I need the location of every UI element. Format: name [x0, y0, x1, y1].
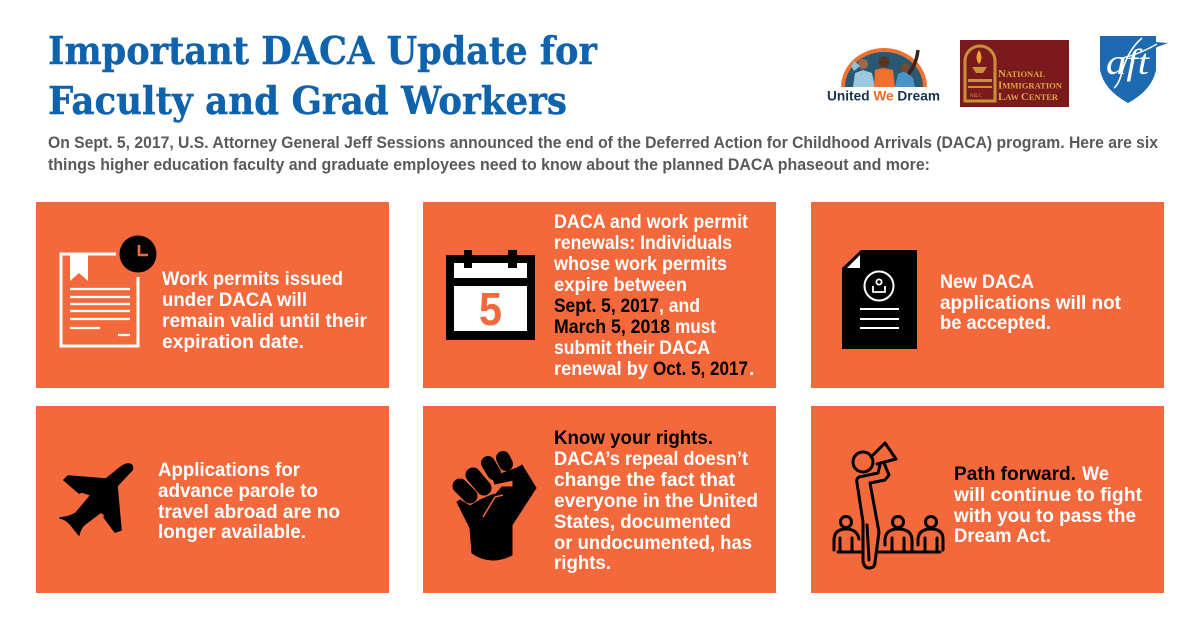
text: work permits: [162, 268, 367, 353]
icon: calendar: [446, 250, 535, 340]
text: work permits: under DACA will: [162, 289, 307, 311]
logo: United We Dream: [827, 48, 940, 104]
text: renewals: Oct. 5, 2017: [653, 358, 748, 380]
panel: advance parole: [36, 406, 389, 593]
text: path forward: [953, 463, 1142, 547]
text: renewals: Sept. 5, 2017: [554, 295, 659, 317]
icon: person with megaphone and crowd: [834, 443, 943, 568]
text: renewals: DACA and work permit: [554, 211, 748, 233]
text: new applications: [940, 271, 1121, 334]
text: know your rights: States, documented: [554, 511, 731, 533]
logo: National Immigration Law Center: NATIONAL: [998, 68, 1045, 80]
text: new applications: applications will not: [940, 292, 1121, 314]
text: renewals: , and: [659, 295, 700, 317]
text: work permits: Work permits issued: [162, 268, 343, 290]
icon: airplane: [60, 464, 132, 535]
title: Faculty and Grad Workers: [48, 78, 567, 123]
icon: application document: [842, 250, 917, 349]
panel: path forward: [811, 406, 1164, 593]
text: know your rights: DACA’s repeal doesn’t: [554, 448, 748, 470]
text: renewals: submit their DACA: [554, 337, 710, 359]
text: renewals: expire between: [554, 274, 687, 296]
icon: document with clock: [61, 236, 156, 346]
text: renewals: whose work permits: [553, 253, 727, 275]
text: path forward: Path forward.: [954, 463, 1076, 485]
logo: AFT shield: aft: [1106, 42, 1150, 82]
icon: raised fist: [457, 458, 536, 560]
text: path forward: Dream Act.: [954, 525, 1051, 547]
intro text: [48, 133, 1158, 174]
text: advance parole: travel abroad are no: [158, 501, 340, 523]
text: work permits: remain valid until their: [162, 310, 367, 332]
text: know your rights: or undocumented, has: [554, 532, 752, 554]
logo: AFT shield: [1100, 36, 1168, 103]
text: advance parole: Applications for: [158, 459, 300, 481]
text: know your rights: change the fact that: [554, 469, 735, 491]
text: renewals: renewals: Individuals: [554, 232, 732, 254]
title: Important DACA Update for: [48, 28, 598, 73]
text: new applications: New DACA: [940, 271, 1034, 293]
text: renewals: must: [675, 316, 716, 338]
intro text: things higher education faculty and graduate employees need to know about the planned DACA phaseout and more:: [48, 155, 930, 174]
text: work permits: expiration date.: [162, 331, 304, 353]
text: know your rights: rights.: [554, 552, 611, 574]
logo: National Immigration Law Center: NILC: [970, 94, 982, 99]
panel: new applications: [811, 202, 1164, 388]
text: advance parole: [158, 459, 340, 543]
text: know your rights: Know your rights.: [554, 427, 713, 449]
text: renewals: March 5, 2018: [554, 316, 670, 338]
panel: work permits: [36, 202, 389, 388]
text: path forward: with you to pass the: [953, 505, 1136, 527]
text: renewals: .: [749, 358, 754, 380]
text: renewals: [553, 211, 754, 380]
logo: United We Dream: United We Dream: [827, 88, 940, 104]
panel: know your rights: [423, 406, 776, 593]
logo: National Immigration Law Center: LAW CENTER: [998, 91, 1059, 103]
text: advance parole: advance parole to: [158, 480, 318, 502]
text: know your rights: [554, 427, 758, 574]
text: advance parole: longer available.: [158, 521, 306, 543]
text: path forward: We: [1082, 463, 1109, 485]
panel: renewals: [423, 202, 776, 388]
title: [48, 28, 598, 123]
logo: National Immigration Law Center: [960, 40, 1069, 107]
logo: National Immigration Law Center: IMMIGRATION: [998, 80, 1063, 92]
icon: calendar: 5: [479, 283, 502, 335]
text: know your rights: everyone in the United: [554, 490, 758, 512]
text: new applications: be accepted.: [940, 312, 1051, 334]
text: renewals: renewal by: [554, 358, 648, 380]
text: path forward: will continue to fight: [953, 484, 1142, 506]
